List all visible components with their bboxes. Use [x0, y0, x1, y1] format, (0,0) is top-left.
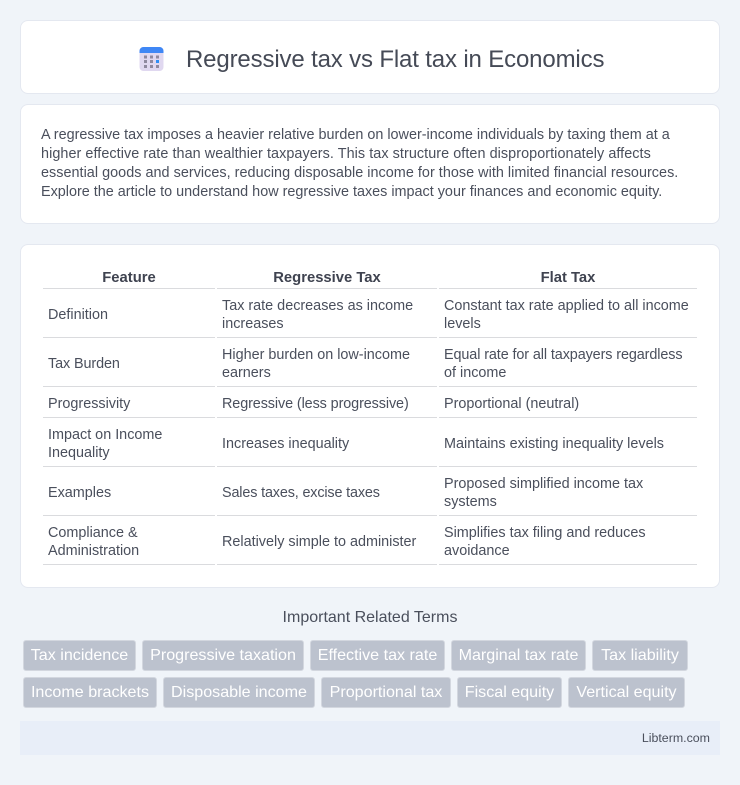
- column headers: [102, 270, 596, 286]
- related terms tags: Fiscal equity: [465, 683, 554, 701]
- related terms tags: Disposable income: [171, 683, 307, 701]
- row: progressivity: Progressivity: [48, 396, 130, 412]
- row: compliance and administration: [48, 525, 646, 559]
- row: examples: Proposed simplified income tax: [444, 476, 643, 492]
- intro text panel: higher effective rate than wealthier taxpayers. This tax structure often disproportionately affects: [41, 146, 651, 162]
- related terms tags: Proportional tax: [330, 683, 442, 701]
- row: definition: Tax rate decreases as income: [222, 298, 413, 314]
- row: compliance and administration: Administration: [48, 543, 139, 559]
- row: definition: Definition: [48, 307, 108, 323]
- related terms tags: Income brackets: [31, 683, 149, 701]
- intro text panel: [20, 104, 720, 224]
- row: definition: levels: [444, 316, 481, 332]
- row: compliance and administration: Compliance &: [48, 525, 138, 541]
- row: impact on income inequality: Impact on Income: [48, 427, 162, 443]
- intro text panel: Explore the article to understand how regressive taxes impact your finances and economic equity.: [41, 184, 662, 200]
- row: definition: [48, 298, 689, 332]
- row: examples: Examples: [48, 485, 111, 501]
- related terms tags: [23, 640, 688, 708]
- header card: [20, 20, 720, 94]
- column headers: Flat Tax: [541, 270, 595, 286]
- row: tax burden: of income: [444, 365, 506, 381]
- row: impact on income inequality: Inequality: [48, 445, 110, 461]
- row: progressivity: Regressive (less progressive): [222, 396, 409, 412]
- icon: calendar: [140, 47, 164, 71]
- row: tax burden: Higher burden on low-income: [222, 347, 410, 363]
- row: tax burden: Tax Burden: [48, 356, 120, 372]
- row: definition: increases: [222, 316, 284, 332]
- footer credit: Libterm.com: [642, 731, 710, 745]
- related terms tags: Marginal tax rate: [459, 646, 578, 664]
- row: progressivity: Proportional (neutral): [444, 396, 579, 412]
- row: impact on income inequality: Maintains existing inequality levels: [444, 436, 664, 452]
- row: compliance and administration: avoidance: [444, 543, 510, 559]
- related terms tags: Effective tax rate: [318, 646, 437, 664]
- row: compliance and administration: Relatively simple to administer: [222, 534, 416, 550]
- row: examples: systems: [444, 494, 497, 510]
- related terms heading: Important Related Terms: [283, 609, 457, 626]
- related terms tags: Progressive taxation: [150, 646, 296, 664]
- footer bar: [20, 721, 720, 755]
- title: Regressive tax vs Flat tax in Economics: [186, 46, 604, 73]
- column headers: Regressive Tax: [273, 270, 381, 286]
- row: examples: [48, 476, 643, 510]
- intro text panel: A regressive tax imposes a heavier relative burden on lower-income individuals by taxing them at a: [41, 127, 670, 143]
- comparison table panel: [20, 244, 720, 588]
- intro text panel: essential goods and services, reducing disposable income for those with limited financial resources.: [41, 165, 678, 181]
- row: progressivity: [48, 396, 579, 412]
- row: tax burden: earners: [222, 365, 271, 381]
- related terms tags: Tax incidence: [31, 646, 128, 664]
- row: impact on income inequality: [48, 427, 664, 461]
- row: impact on income inequality: Increases inequality: [222, 436, 349, 452]
- comparison table: [43, 270, 697, 565]
- row: tax burden: Equal rate for all taxpayers regardless: [444, 347, 682, 363]
- row: compliance and administration: Simplifies tax filing and reduces: [444, 525, 646, 541]
- column headers: Feature: [102, 270, 156, 286]
- row: tax burden: [48, 347, 682, 381]
- row: examples: Sales taxes, excise taxes: [222, 485, 380, 501]
- related terms tags: Vertical equity: [576, 683, 677, 701]
- row: definition: Constant tax rate applied to all income: [444, 298, 689, 314]
- related terms tags: Tax liability: [601, 646, 679, 664]
